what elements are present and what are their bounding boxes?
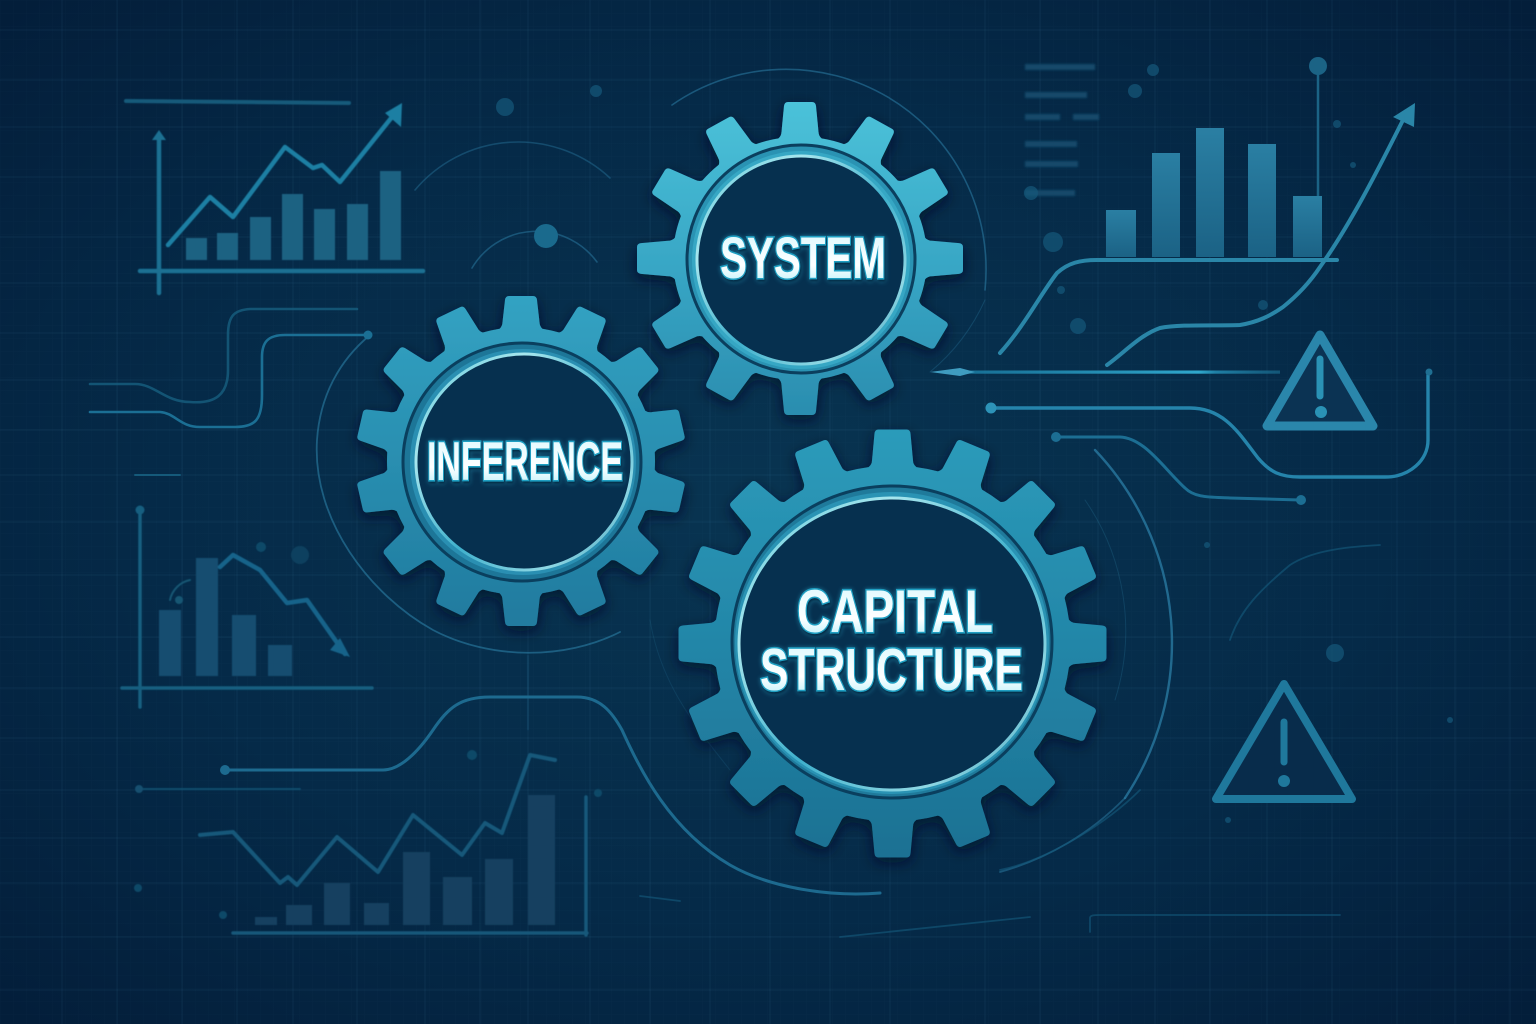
right flow line to diamond [986, 368, 1432, 477]
icon: warning triangle lower [1216, 684, 1352, 799]
top-right text placeholders [1025, 64, 1099, 196]
label: System: SYSTEM [720, 226, 886, 291]
gear: Inference [351, 291, 691, 631]
gear: System [630, 95, 970, 422]
label: Capital Structure [760, 578, 1023, 703]
label: Capital Structure: CAPITAL [797, 578, 993, 645]
inbound arrow line [930, 368, 1280, 376]
scattered dots [496, 64, 1453, 823]
target dot [534, 224, 558, 248]
gear: Capital Structure [672, 424, 1112, 864]
label: Capital Structure: STRUCTURE [760, 637, 1023, 703]
left connector curves [90, 309, 372, 427]
right flow line to dot [1051, 432, 1306, 505]
top-right bar chart [1000, 57, 1337, 353]
icon: warning triangle upper [1267, 335, 1373, 426]
label: Inference: INFERENCE [427, 430, 623, 492]
top-left growth chart [126, 101, 423, 293]
orbit arcs around the gears [317, 69, 1172, 872]
rising trend arrow [1107, 103, 1415, 365]
bottom-left declining chart [122, 506, 372, 707]
small left connector [135, 474, 180, 476]
lower-left flow line [222, 697, 880, 894]
faint lower-right connectors [640, 545, 1380, 937]
bottom growth chart [134, 655, 602, 935]
